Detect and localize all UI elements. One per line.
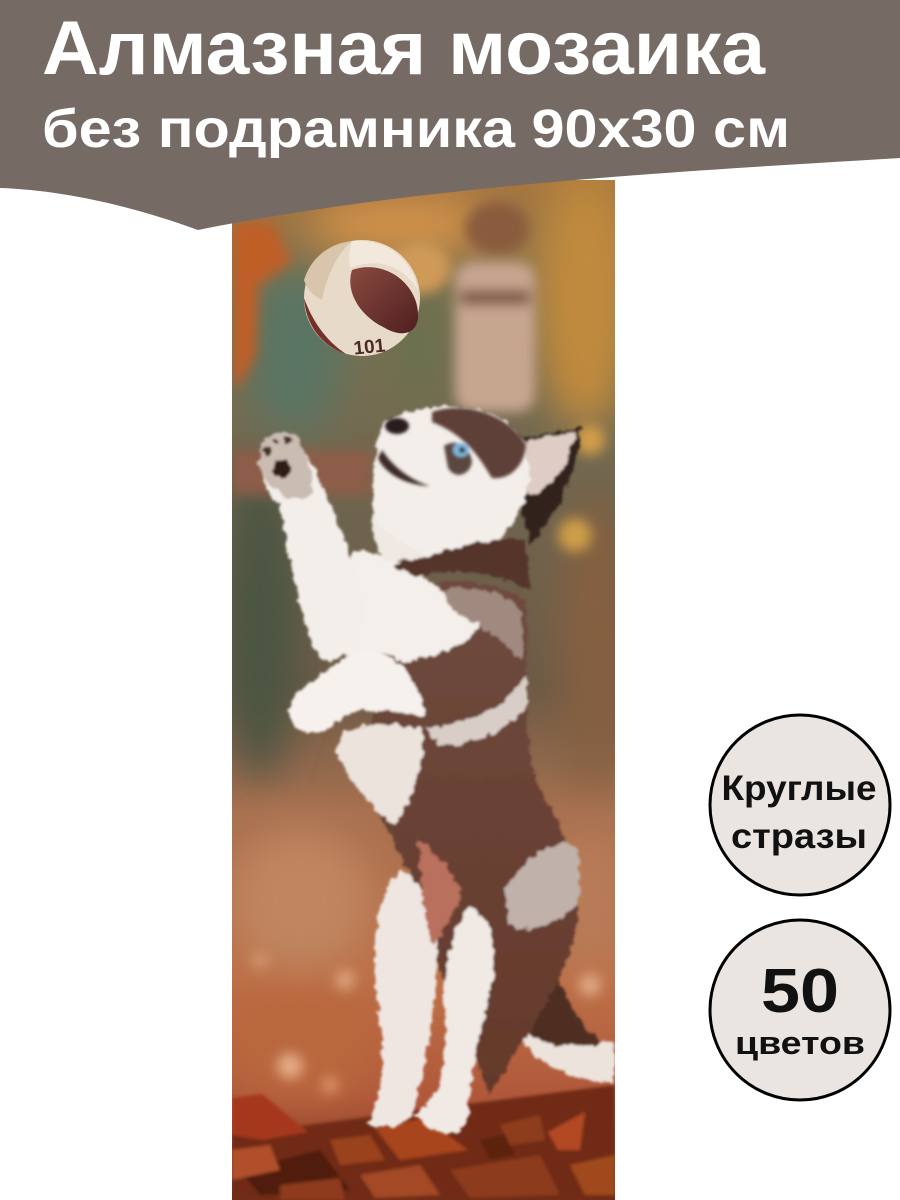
ear (515, 428, 580, 545)
right leg (414, 905, 495, 1134)
dog face (378, 408, 526, 486)
badge: round rhinestones: стразы (731, 817, 867, 856)
badge: round rhinestones (710, 715, 890, 895)
neck white (372, 510, 511, 561)
body (355, 581, 578, 1095)
icon: ball (304, 240, 420, 360)
white side band (425, 675, 528, 745)
left leg (366, 868, 438, 1128)
belly pink (418, 840, 462, 945)
photo: husky puppy playing with a ball (220, 170, 635, 1200)
subtitle: без подрамника 90х30 см (42, 99, 790, 159)
badge: 50 colours: 50 (761, 957, 839, 1026)
paw (260, 432, 312, 499)
hip grey (505, 843, 580, 929)
badge: round rhinestones: Круглые (722, 769, 876, 808)
raised arm (255, 452, 352, 664)
lower arm (289, 651, 425, 733)
chest white (341, 551, 478, 662)
dog (259, 407, 615, 1134)
header banner (0, 0, 900, 230)
foreground leaves (232, 1085, 615, 1200)
nose and mouth (385, 418, 409, 434)
head (372, 407, 528, 556)
paw pads (263, 436, 292, 479)
badge: 50 colours: цветов (735, 1025, 865, 1061)
collar of brown fur (395, 539, 530, 590)
head brown mask (432, 408, 526, 478)
shoulder grey (440, 588, 523, 660)
white belly below arm (335, 724, 422, 825)
title: Алмазная мозаика (42, 6, 766, 91)
eye (453, 443, 469, 457)
photo background (220, 170, 635, 1200)
badge: 50 colours (710, 920, 890, 1100)
icon: ball: 101 (353, 335, 387, 360)
tail (528, 978, 602, 1048)
